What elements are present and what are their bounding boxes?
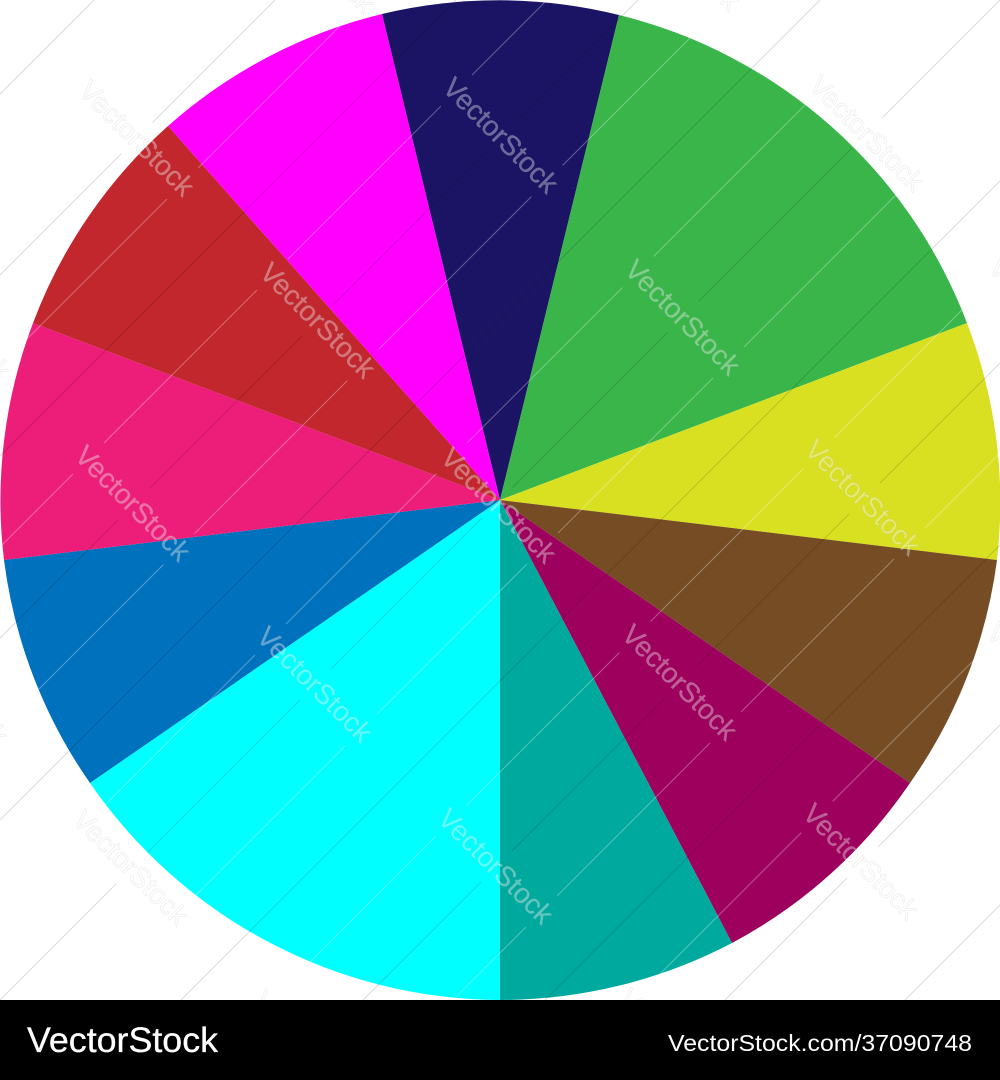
watermarks: VectorStock bbox=[619, 254, 747, 382]
watermarks: VectorStock bbox=[803, 70, 931, 198]
watermarks: VectorStock bbox=[616, 619, 744, 747]
slice: cyan bbox=[90, 500, 500, 1000]
footer brand: VectorStock bbox=[27, 1021, 219, 1060]
slice: teal bbox=[500, 500, 732, 1000]
watermarks: VectorStock bbox=[797, 798, 925, 926]
footer bar bbox=[0, 1000, 1000, 1080]
slice: yellow bbox=[500, 323, 1000, 560]
slice: blue bbox=[4, 500, 500, 783]
watermarks: VectorStock bbox=[254, 257, 382, 385]
footer image id: VectorStock.com/37090748 bbox=[668, 1030, 972, 1056]
watermarks: VectorStock bbox=[437, 72, 565, 200]
watermarks: VectorStock bbox=[69, 440, 197, 568]
slice: red bbox=[33, 126, 500, 500]
watermarks: VectorStock bbox=[67, 804, 195, 932]
slice: pink bbox=[0, 323, 500, 560]
watermarks: VectorStock bbox=[251, 621, 379, 749]
watermarks: VectorStock bbox=[435, 442, 563, 570]
slice: navy bbox=[382, 0, 619, 500]
slice: green bbox=[500, 15, 967, 500]
watermarks: VectorStock bbox=[799, 434, 927, 562]
slice: magenta bbox=[168, 14, 500, 500]
slice: brown bbox=[500, 500, 997, 783]
watermarks: VectorStock bbox=[432, 803, 560, 931]
watermarks: VectorStock bbox=[73, 75, 201, 203]
slice: maroon bbox=[500, 500, 910, 943]
